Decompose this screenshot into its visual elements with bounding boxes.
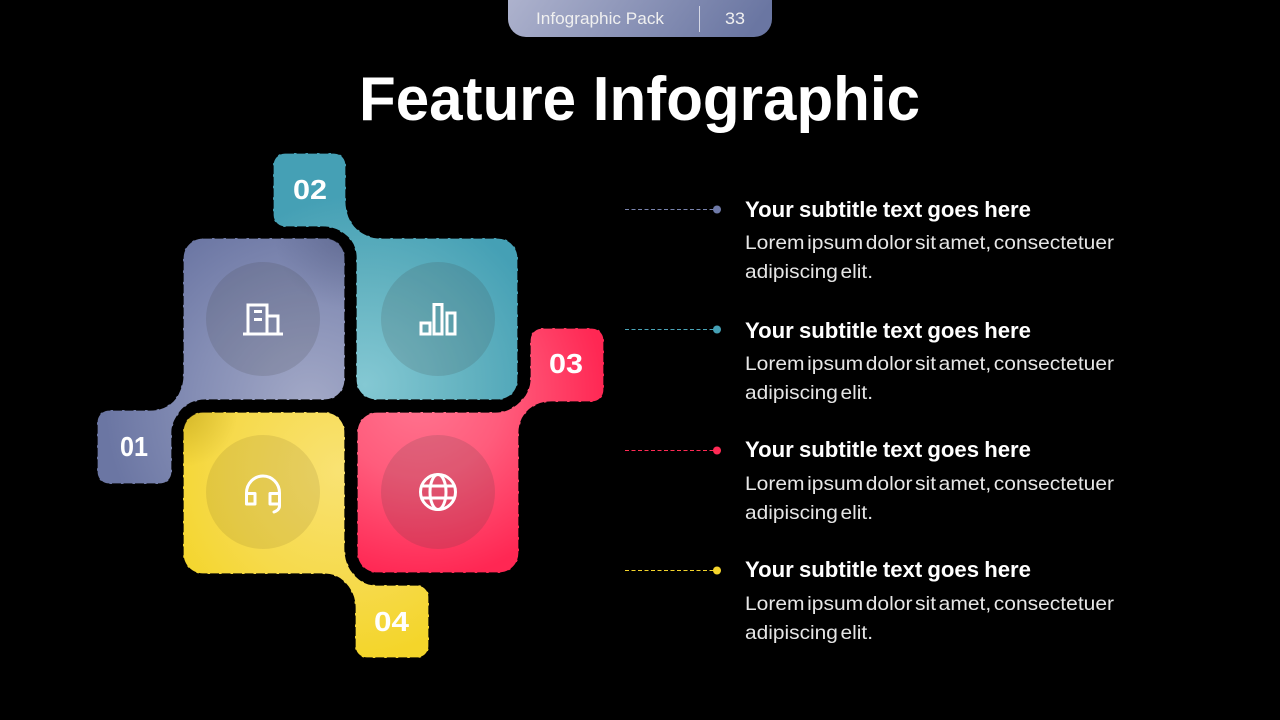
text block 2: Lorem ipsum dolor sit amet, consectetuer: [745, 353, 1115, 375]
text block 2: Your subtitle text goes here: [745, 318, 1031, 343]
text block 3: adipiscing elit.: [745, 502, 873, 524]
text block 1: adipiscing elit.: [745, 261, 873, 283]
text block 3: [745, 437, 1115, 524]
icon: headset: [246, 476, 280, 512]
icon: bar chart: [421, 304, 455, 334]
text block 3: Lorem ipsum dolor sit amet, consectetuer: [745, 473, 1115, 495]
text block 1: Your subtitle text goes here: [745, 197, 1031, 222]
connector 1 purple: [625, 206, 721, 214]
text block 2: [745, 318, 1115, 404]
page number: 33: [725, 10, 745, 28]
text block 4: adipiscing elit.: [745, 622, 873, 644]
connector 3 red: [625, 446, 721, 454]
connector 2 teal: [625, 326, 721, 334]
number 03: 03: [549, 348, 583, 379]
text block 1: [745, 197, 1115, 283]
icon: building: [243, 305, 283, 334]
header label: Infographic Pack: [536, 10, 665, 28]
title: Feature Infographic: [359, 65, 920, 134]
text block 2: adipiscing elit.: [745, 382, 873, 404]
panel: feature 03 red: [357, 328, 604, 573]
number 04: 04: [374, 606, 409, 637]
connector 4 yellow: [625, 566, 721, 574]
number 02: 02: [293, 174, 327, 205]
icon: globe: [420, 474, 456, 510]
text block 4: Your subtitle text goes here: [745, 557, 1031, 582]
text block 3: Your subtitle text goes here: [745, 437, 1031, 462]
panel: feature 02 teal: [273, 153, 518, 400]
number 01: 01: [120, 431, 148, 462]
text block 1: Lorem ipsum dolor sit amet, consectetuer: [745, 232, 1115, 254]
text block 4: Lorem ipsum dolor sit amet, consectetuer: [745, 593, 1115, 615]
panel: feature 04 yellow: [183, 412, 429, 658]
header tab: [508, 0, 772, 37]
panel: feature 01 purple: [97, 238, 345, 484]
text block 4: [745, 557, 1115, 644]
